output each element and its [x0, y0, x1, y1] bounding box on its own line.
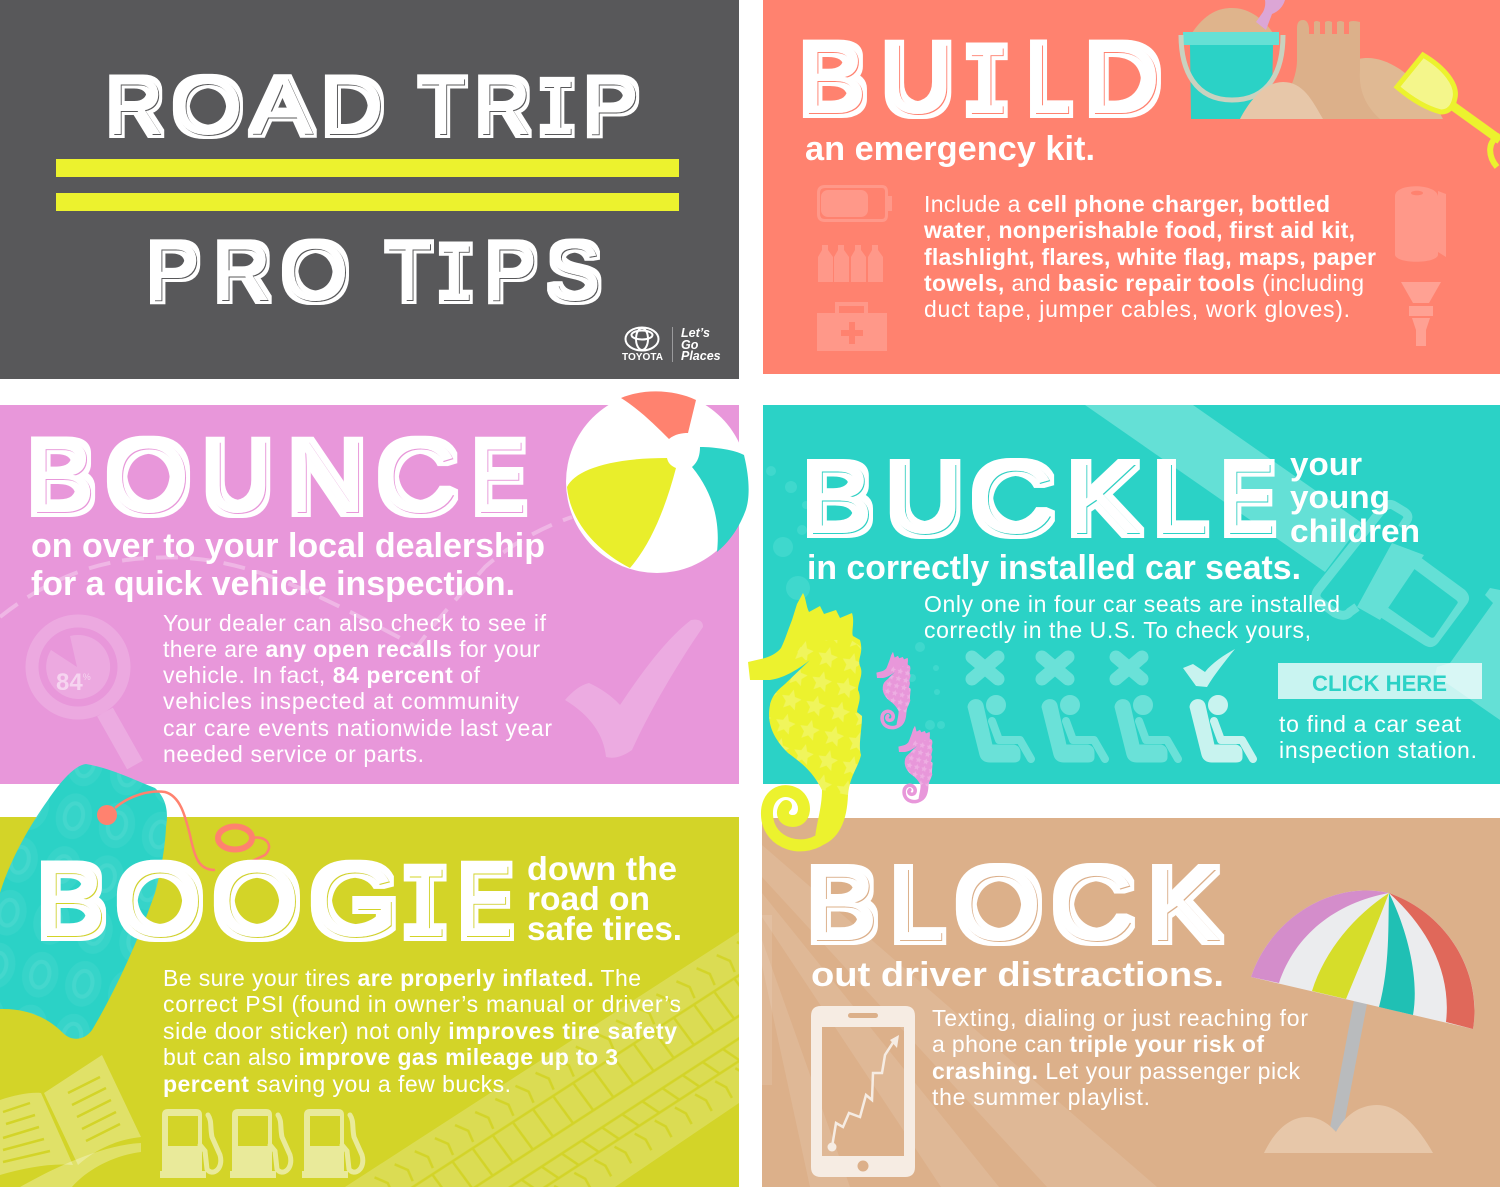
icon: phone with rising chart	[811, 1006, 915, 1177]
body text: inspection station.	[1279, 737, 1477, 763]
title: pro tips: P	[148, 226, 200, 318]
title: road trip: R	[476, 62, 531, 152]
title: pro tips: O	[282, 226, 349, 318]
heading: buckle: K	[1067, 443, 1141, 555]
heading: boogie: O	[117, 844, 203, 958]
toyota logo: TOYOTA	[622, 352, 663, 363]
title: pro tips: T	[386, 226, 432, 318]
icon: large check mark	[565, 620, 703, 758]
heading: buckle: C	[971, 443, 1054, 555]
title: pro tips: R	[215, 226, 272, 318]
illustration: beach ball	[566, 391, 749, 573]
heading: boogie: G	[310, 844, 399, 958]
icons: car seats row	[968, 696, 1253, 762]
subheading: on over to your local dealership	[31, 527, 545, 565]
body text: needed service or parts.	[163, 741, 424, 767]
background sun rays	[762, 845, 1157, 1187]
background seat belt graphic	[1085, 405, 1500, 720]
body text: to find a car seat	[1279, 711, 1462, 737]
icon: open owner's manual book	[0, 1055, 141, 1187]
heading: bounce: O	[107, 420, 190, 534]
double yellow road lines	[56, 159, 679, 211]
body text: the summer playlist.	[932, 1084, 1150, 1110]
toyota logo: Places	[681, 349, 721, 363]
title: road trip: R	[107, 62, 164, 152]
panel: block out driver distractions	[762, 818, 1500, 1187]
subheading	[31, 527, 545, 603]
side heading: your young children: young	[1290, 479, 1390, 515]
body text	[924, 591, 1340, 643]
heading: block: O	[956, 847, 1042, 962]
heading: block: L	[891, 847, 944, 962]
dashed route line	[0, 517, 572, 647]
body text	[163, 965, 681, 1097]
background tire track	[345, 932, 739, 1187]
side heading: down the road on safe tires: safe tires.	[527, 910, 682, 947]
heading: build: L	[1029, 23, 1071, 134]
heading: block: B	[807, 847, 879, 962]
body text: car care events nationwide last year	[163, 715, 552, 741]
panel: road trip pro tips title	[0, 0, 739, 379]
side heading: down the road on safe tires	[527, 850, 682, 947]
title: road trip: D	[322, 62, 384, 152]
heading: bounce: E	[474, 420, 525, 534]
illustration: bodyboard with leash	[0, 764, 269, 1039]
icon: magnifier with 84 percent: %	[83, 672, 91, 682]
body text: percent saving you a few bucks.	[163, 1071, 511, 1097]
title: road trip: I	[537, 68, 577, 159]
heading: build: D	[1085, 23, 1161, 134]
panel: build an emergency kit	[763, 0, 1500, 374]
body text: side door sticker) not only improves tire safety	[163, 1018, 677, 1044]
title: road trip: P	[584, 62, 640, 152]
body text: water, nonperishable food, first aid kit,	[923, 217, 1355, 243]
panel: buckle children in car seats	[748, 405, 1500, 847]
side heading: your young children: your	[1290, 446, 1362, 482]
icon: paper towel roll	[1395, 186, 1446, 262]
illustration: beach umbrella in sand	[1251, 891, 1474, 1153]
icon: flashlight	[1401, 282, 1441, 346]
body text: duct tape, jumper cables, work gloves).	[924, 296, 1350, 322]
body text: there are any open recalls for your	[163, 636, 540, 662]
illustration: sand bucket, castle and shovel	[1181, 0, 1500, 167]
heading: bounce: B	[28, 420, 95, 534]
body text: Include a cell phone charger, bottled	[924, 191, 1330, 217]
panel: boogie safe tires	[0, 764, 739, 1187]
body text	[1279, 711, 1477, 763]
title: pro tips: P	[486, 226, 537, 318]
button: click here	[1278, 663, 1482, 699]
illustration: yellow seahorse	[748, 593, 862, 847]
side heading: your young children: children	[1290, 513, 1420, 549]
title: pro tips: S	[547, 226, 601, 318]
side heading: your young children	[1290, 446, 1420, 549]
heading: buckle: U	[887, 443, 964, 555]
icons: three gas pumps	[160, 1109, 363, 1178]
body text: towels, and basic repair tools (including	[924, 270, 1364, 296]
heading: build: I	[963, 31, 1010, 143]
subheading: an emergency kit.	[805, 130, 1095, 168]
heading: boogie: I	[401, 851, 450, 967]
heading: bounce: N	[288, 420, 367, 534]
body text: Only one in four car seats are installed	[924, 591, 1340, 617]
title: road trip: A	[252, 62, 313, 152]
panel: bounce vehicle inspection	[0, 391, 749, 784]
body text	[923, 191, 1376, 322]
heading: boogie: E	[460, 844, 512, 958]
body text: vehicle. In fact, 84 percent of	[163, 662, 481, 688]
icon: magnifier with 84 percent	[32, 621, 135, 765]
heading: buckle: E	[1223, 443, 1274, 555]
illustration: pink seahorse bottom	[898, 726, 933, 802]
heading: build: B	[800, 23, 867, 134]
icons: three x marks and one check	[972, 649, 1235, 687]
heading: boogie: O	[214, 844, 300, 958]
heading: build: U	[882, 23, 954, 134]
toyota logo: Let’s	[681, 326, 710, 340]
body text	[932, 1005, 1308, 1110]
button: click here: CLICK HERE	[1312, 671, 1447, 696]
body text: a phone can triple your risk of	[932, 1031, 1264, 1057]
body text	[163, 610, 552, 767]
body text: correctly in the U.S. To check yours,	[924, 617, 1311, 643]
body text: crashing. Let your passenger pick	[932, 1058, 1300, 1084]
background bubbles	[766, 466, 945, 730]
icon: water bottles	[818, 245, 883, 282]
side heading: down the road on safe tires: down the	[527, 850, 677, 887]
icon: first aid kit	[817, 302, 887, 351]
body text: Your dealer can also check to see if	[163, 610, 547, 636]
subheading: in correctly installed car seats.	[807, 549, 1301, 587]
heading: buckle: B	[803, 443, 874, 555]
toyota logo	[622, 326, 721, 363]
toyota logo: Go	[681, 338, 699, 352]
title: pro tips: I	[437, 231, 475, 325]
icon: battery	[817, 185, 892, 222]
title: road trip: T	[420, 62, 466, 152]
body text: Texting, dialing or just reaching for	[932, 1005, 1308, 1031]
side heading: down the road on safe tires: road on	[527, 880, 650, 917]
subheading: for a quick vehicle inspection.	[31, 565, 515, 603]
illustration: pink seahorse top	[876, 652, 911, 728]
heading: bounce: U	[203, 420, 273, 534]
heading: boogie: B	[38, 844, 106, 958]
heading: block: C	[1052, 847, 1134, 962]
body text: vehicles inspected at community	[163, 688, 520, 714]
body text: but can also improve gas mileage up to 3	[163, 1044, 618, 1070]
body text: Be sure your tires are properly inflated. The	[163, 965, 641, 991]
subheading: out driver distractions.	[811, 956, 1224, 994]
heading: block: K	[1148, 847, 1221, 962]
body text: correct PSI (found in owner’s manual or driver’s	[163, 991, 681, 1017]
icon: magnifier with 84 percent: 84	[56, 669, 83, 696]
heading: bounce: C	[378, 420, 457, 534]
title: road trip: O	[173, 62, 243, 152]
body text: flashlight, flares, white flag, maps, paper	[924, 244, 1376, 270]
heading: buckle: L	[1154, 443, 1207, 555]
